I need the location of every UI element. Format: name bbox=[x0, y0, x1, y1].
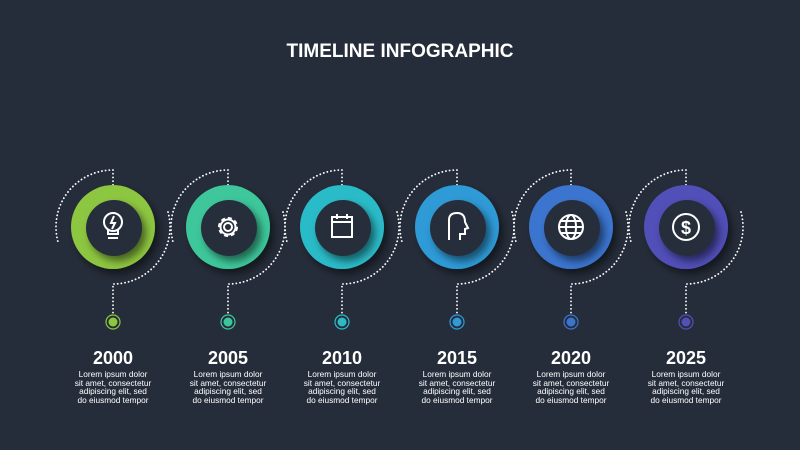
step: 2025: do eiusmod tempor bbox=[650, 395, 722, 405]
icon: globe bbox=[559, 215, 583, 239]
step: 2005: Lorem ipsum dolor bbox=[194, 369, 263, 379]
step: 2000: adipiscing elit, sed bbox=[79, 386, 147, 396]
step: 2005: 2005 bbox=[208, 348, 248, 368]
step: 2020: 2020 bbox=[551, 348, 591, 368]
step: 2020: do eiusmod tempor bbox=[535, 395, 607, 405]
step: 2000 bbox=[56, 170, 170, 405]
step: 2005: sit amet, consectetur bbox=[190, 378, 267, 388]
step: 2025: sit amet, consectetur bbox=[648, 378, 725, 388]
icon: gear bbox=[219, 218, 237, 236]
step: 2015 bbox=[400, 170, 514, 405]
icon: head bbox=[449, 213, 468, 240]
step: 2000: sit amet, consectetur bbox=[75, 378, 152, 388]
step: 2025 bbox=[629, 170, 743, 405]
icon: calendar bbox=[332, 214, 352, 237]
step: 2010 bbox=[285, 170, 399, 405]
step: 2020: Lorem ipsum dolor bbox=[537, 369, 606, 379]
step: 2010: Lorem ipsum dolor bbox=[308, 369, 377, 379]
step: 2005: do eiusmod tempor bbox=[192, 395, 264, 405]
step: 2015: adipiscing elit, sed bbox=[423, 386, 491, 396]
step: 2015: Lorem ipsum dolor bbox=[423, 369, 492, 379]
step: 2010: sit amet, consectetur bbox=[304, 378, 381, 388]
icon: dollar: $ bbox=[681, 218, 691, 238]
step: 2020: adipiscing elit, sed bbox=[537, 386, 605, 396]
step: 2000: Lorem ipsum dolor bbox=[79, 369, 148, 379]
title: TIMELINE INFOGRAPHIC bbox=[287, 41, 514, 62]
step: 2000: do eiusmod tempor bbox=[77, 395, 149, 405]
step: 2010: do eiusmod tempor bbox=[306, 395, 378, 405]
icon: dollar bbox=[673, 214, 699, 240]
step: 2020 bbox=[514, 170, 628, 405]
step: 2010: adipiscing elit, sed bbox=[308, 386, 376, 396]
step: 2005 bbox=[171, 170, 285, 405]
step: 2015: do eiusmod tempor bbox=[421, 395, 493, 405]
step: 2025: adipiscing elit, sed bbox=[652, 386, 720, 396]
icon: bulb bbox=[104, 213, 122, 238]
step: 2000: 2000 bbox=[93, 348, 133, 368]
step: 2025: Lorem ipsum dolor bbox=[652, 369, 721, 379]
step: 2020: sit amet, consectetur bbox=[533, 378, 610, 388]
step: 2025: 2025 bbox=[666, 348, 706, 368]
step: 2015: sit amet, consectetur bbox=[419, 378, 496, 388]
step: 2010: 2010 bbox=[322, 348, 362, 368]
step: 2005: adipiscing elit, sed bbox=[194, 386, 262, 396]
step: 2015: 2015 bbox=[437, 348, 477, 368]
